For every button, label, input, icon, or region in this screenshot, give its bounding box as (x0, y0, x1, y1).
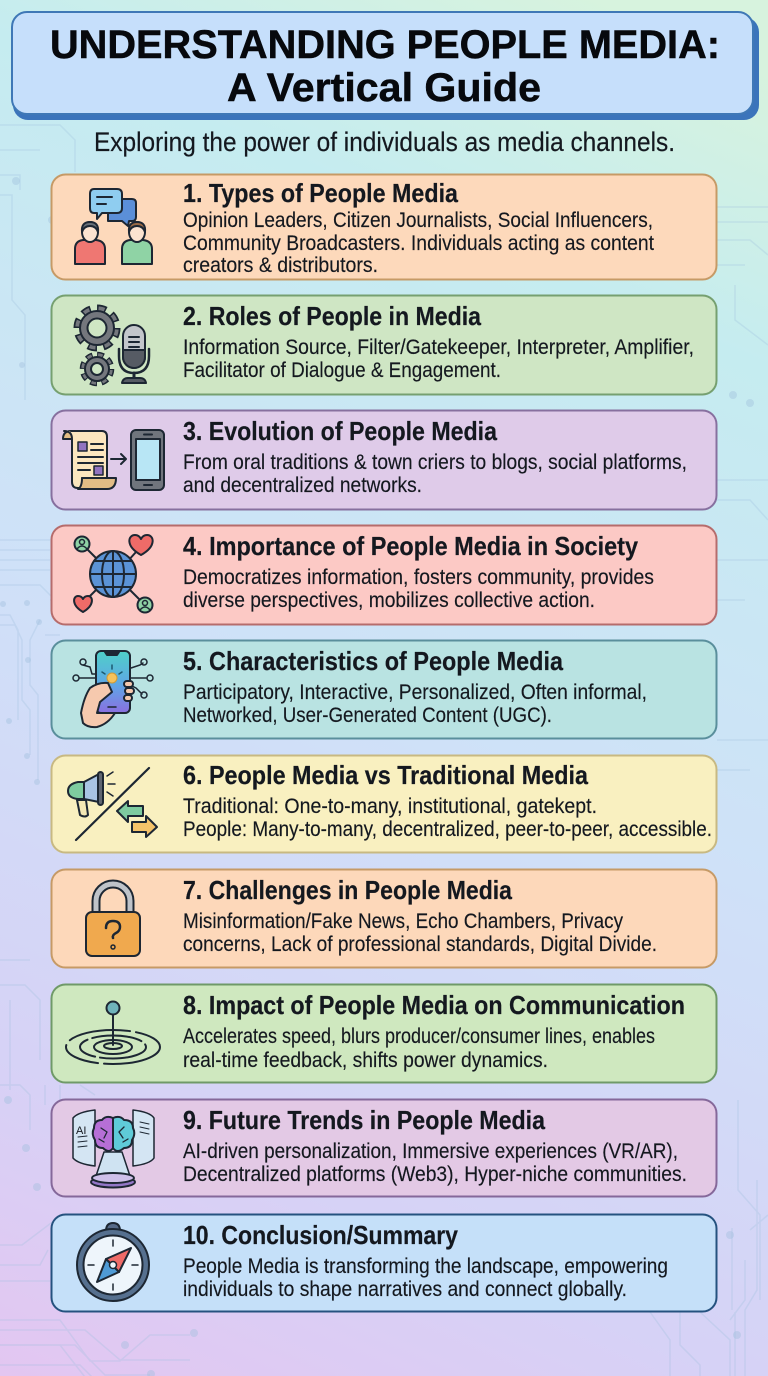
panel 9: future (52, 1100, 716, 1196)
heading: 2. Roles of People in Media (183, 301, 481, 331)
heading: 3. Evolution of People Media (183, 416, 497, 446)
subtitle: Exploring the power of individuals as media channels. (94, 127, 675, 157)
heading: 1. Types of People Media (183, 178, 458, 208)
panel 8: impact (52, 984, 716, 1082)
body text: AI-driven personalization, Immersive experiences (VR/AR), (183, 1139, 678, 1163)
panel 7: challenges (52, 870, 716, 968)
body text (183, 909, 657, 956)
body text (183, 450, 687, 497)
heading: 8. Impact of People Media on Communication (183, 990, 685, 1020)
body text: creators & distributors. (183, 253, 378, 277)
body text (183, 794, 712, 841)
icon: ripple (66, 1002, 160, 1064)
title panel (12, 12, 759, 120)
icon: compass (77, 1223, 149, 1301)
body text: Decentralized platforms (Web3), Hyper-niche communities. (183, 1162, 687, 1186)
body text: Facilitator of Dialogue & Engagement. (183, 358, 501, 382)
body text (183, 565, 654, 612)
panel 10: conclusion (52, 1214, 716, 1312)
heading: 7. Challenges in People Media (183, 875, 512, 905)
title line 1: UNDERSTANDING PEOPLE MEDIA: (50, 23, 720, 67)
body text (183, 680, 647, 727)
body text: Misinformation/Fake News, Echo Chambers, Privacy (183, 909, 623, 933)
panel 5: characteristics (52, 640, 716, 738)
body text: Accelerates speed, blurs producer/consumer lines, enables (183, 1024, 655, 1048)
title line 2: A Vertical Guide (227, 66, 541, 110)
panel 2: roles (52, 296, 716, 394)
heading: 9. Future Trends in People Media (183, 1105, 545, 1135)
icon: scroll to phone (63, 430, 164, 490)
body text (183, 1139, 687, 1186)
body text (183, 335, 694, 382)
icon: chat people (75, 189, 152, 264)
panel 1: types (52, 174, 716, 280)
body text: diverse perspectives, mobilizes collective action. (183, 588, 595, 612)
icon: megaphone vs arrows (68, 768, 157, 840)
body text (183, 1254, 668, 1301)
icon: globe network (74, 535, 153, 612)
icon: hand holding phone (73, 651, 153, 727)
body text: Opinion Leaders, Citizen Journalists, Social Influencers, (183, 208, 653, 232)
body text: Democratizes information, fosters community, provides (183, 565, 654, 589)
body text: People: Many-to-many, decentralized, peer-to-peer, accessible. (183, 817, 712, 841)
icon: holographic brain: AI (76, 1125, 86, 1137)
heading: 5. Characteristics of People Media (183, 646, 563, 676)
body text: Traditional: One-to-many, institutional, gatekept. (183, 794, 597, 818)
body text: and decentralized networks. (183, 473, 422, 497)
body text: individuals to shape narratives and connect globally. (183, 1277, 627, 1301)
icon: padlock with question mark (86, 884, 140, 956)
icon: gears and microphone (78, 308, 149, 383)
body text: Information Source, Filter/Gatekeeper, Interpreter, Amplifier, (183, 335, 694, 359)
body text: Networked, User-Generated Content (UGC). (183, 703, 552, 727)
heading: 6. People Media vs Traditional Media (183, 760, 588, 790)
heading: 10. Conclusion/Summary (183, 1220, 458, 1250)
body text: People Media is transforming the landscape, empowering (183, 1254, 668, 1278)
body text: From oral traditions & town criers to blogs, social platforms, (183, 450, 687, 474)
body text (183, 1024, 655, 1072)
panel 6: versus (52, 756, 716, 852)
panel 3: evolution (52, 410, 716, 510)
heading: 4. Importance of People Media in Society (183, 531, 638, 561)
body text: Participatory, Interactive, Personalized, Often informal, (183, 680, 647, 704)
body text: Community Broadcasters. Individuals acting as content (183, 231, 654, 255)
body text: real-time feedback, shifts power dynamics. (183, 1048, 548, 1072)
icon: holographic brain (73, 1110, 154, 1188)
panel 4: importance (52, 526, 716, 624)
body text (183, 208, 654, 277)
body text: concerns, Lack of professional standards, Digital Divide. (183, 932, 657, 956)
